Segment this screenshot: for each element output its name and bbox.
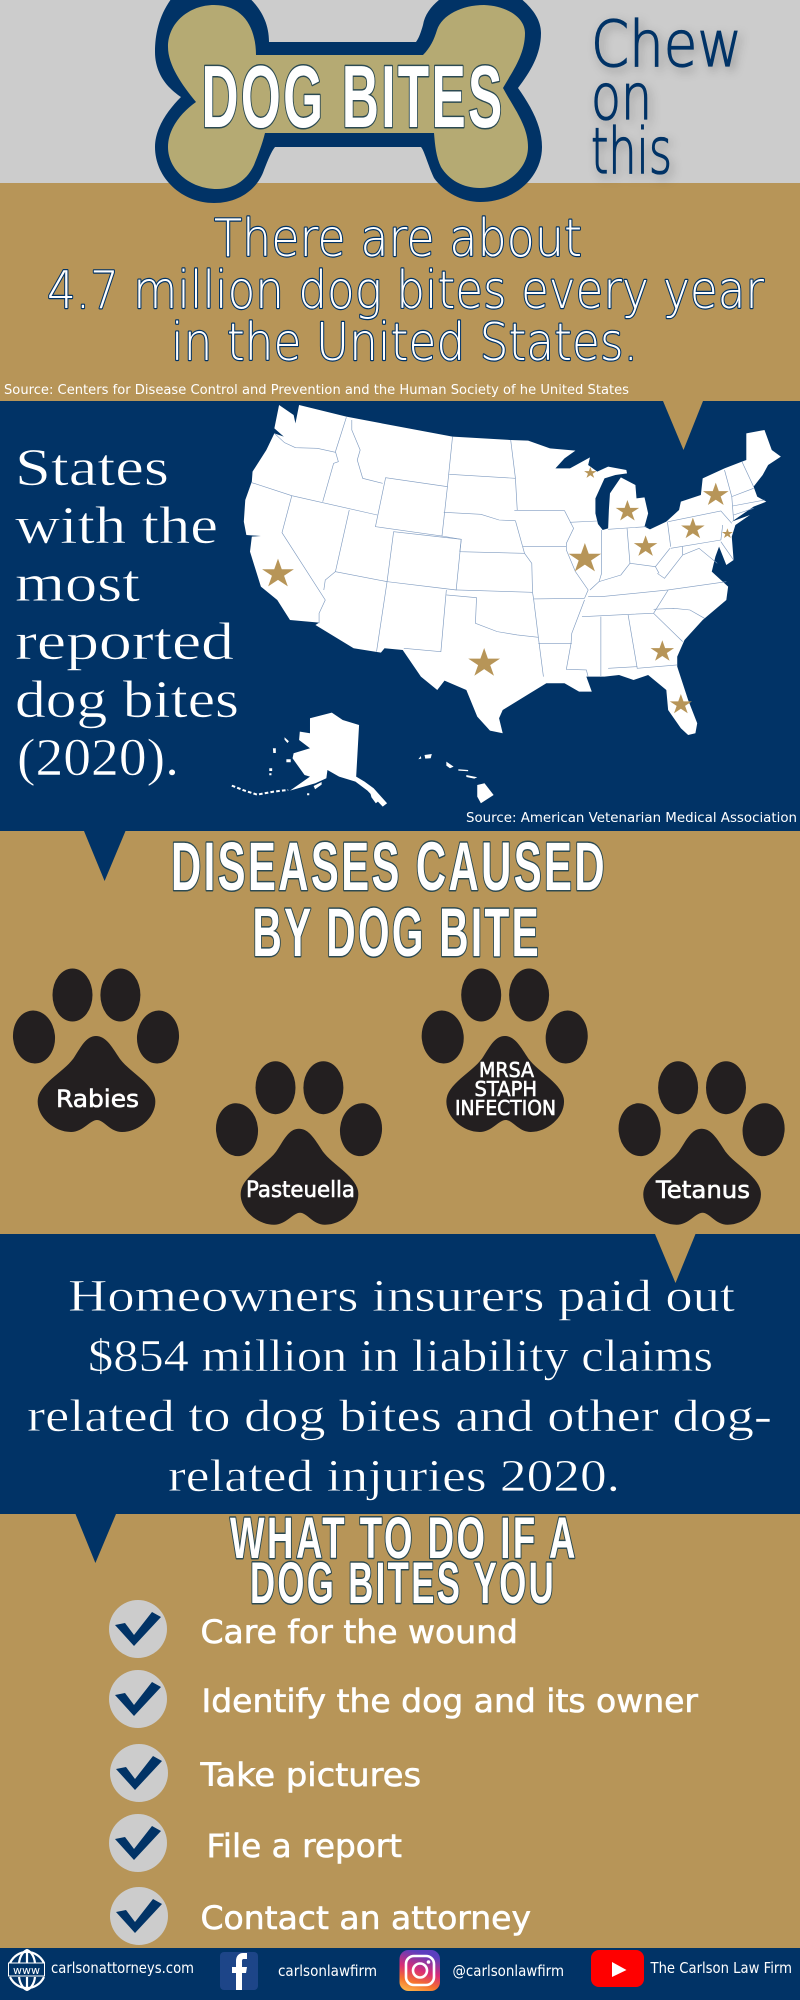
- heading: Chew on this: on: [591, 61, 652, 134]
- icon: paw MRSA staph infection: MRSA: [479, 1058, 534, 1082]
- heading: what to do if a dog bites you: WHAT TO DO IF A: [230, 1506, 578, 1571]
- icon: paw Rabies: [11, 968, 181, 1132]
- footer: website: [8, 1950, 194, 1990]
- text block: homeowners insurers liability claims: $854 million in liability claims: [88, 1331, 713, 1381]
- checklist item: care for the wound: [109, 1600, 518, 1658]
- heading: Chew on this: Chew: [591, 8, 742, 81]
- arrow: navy pointer into diseases panel: [84, 831, 126, 881]
- icon: paw Pasteuella: Pasteuella: [246, 1178, 355, 1203]
- text block: homeowners insurers liability claims: related injuries 2020.: [168, 1451, 620, 1501]
- icon: paw Pasteuella: [214, 1061, 384, 1225]
- checklist item: care for the wound: Care for the wound: [200, 1613, 518, 1651]
- footer: website: www: [13, 1964, 40, 1977]
- heading: what to do if a dog bites you: DOG BITES YOU: [250, 1551, 556, 1616]
- source note: AVMA: Source: American Vetenarian Medical Association: [466, 811, 797, 826]
- footer: youtube: [591, 1950, 792, 1987]
- text block: homeowners insurers liability claims: related to dog bites and other dog-: [27, 1391, 772, 1441]
- footer: facebook: [220, 1952, 377, 1990]
- text block: states with the most reported dog bites: dog bites: [15, 671, 239, 729]
- icon: paw MRSA staph infection: INFECTION: [455, 1096, 556, 1120]
- text block: 4.7 million dog bites statistic: [47, 209, 765, 373]
- icon: paw MRSA staph infection: [419, 968, 590, 1132]
- footer: instagram: @carlsonlawfirm: [452, 1962, 564, 1980]
- text block: 4.7 million dog bites statistic: There are about: [214, 209, 582, 269]
- checklist item: contact an attorney: [110, 1887, 531, 1945]
- footer: instagram: [400, 1950, 564, 1991]
- icon: paw Tetanus: Tetanus: [655, 1176, 750, 1204]
- text block: states with the most reported dog bites: most: [15, 555, 140, 613]
- text block: 4.7 million dog bites statistic: in the United States.: [171, 313, 638, 373]
- heading: Chew on this: this: [591, 115, 672, 188]
- heading: what to do if a dog bites you: [230, 1506, 578, 1616]
- icon: paw Tetanus: [616, 1061, 787, 1225]
- arrow: navy pointer into advice panel: [76, 1514, 116, 1563]
- icon: paw Rabies: Rabies: [56, 1085, 139, 1113]
- footer: facebook: carlsonlawfirm: [278, 1962, 377, 1980]
- heading: diseases caused by dog bite: [171, 828, 607, 971]
- text block: states with the most reported dog bites: reported: [15, 613, 234, 671]
- checklist item: take pictures: Take pictures: [199, 1756, 421, 1794]
- checklist item: identify the dog and its owner: Identify the dog and its owner: [202, 1682, 699, 1720]
- text block: states with the most reported dog bites: States: [15, 439, 169, 497]
- checklist item: file a report: [109, 1814, 402, 1872]
- source note: CDC: Source: Centers for Disease Control and Prevention and the Human Society of he United States: [4, 383, 629, 398]
- heading: Chew on this: [591, 8, 742, 188]
- text block: states with the most reported dog bites: [15, 439, 239, 787]
- arrow: tan pointer into map panel: [663, 401, 703, 450]
- icon: dog bone logo with title: [155, 0, 542, 203]
- title: DOG BITES: [202, 47, 504, 146]
- checklist item: identify the dog and its owner: [109, 1670, 699, 1728]
- arrow: tan pointer into insurance panel: [655, 1234, 696, 1283]
- text block: homeowners insurers liability claims: [27, 1271, 772, 1501]
- heading: diseases caused by dog bite: BY DOG BITE: [252, 894, 541, 971]
- icon: stars on reported states: [262, 467, 733, 713]
- text block: states with the most reported dog bites: (2020).: [17, 729, 179, 787]
- text block: homeowners insurers liability claims: Homeowners insurers paid out: [68, 1271, 736, 1321]
- checklist item: take pictures: [110, 1744, 421, 1802]
- icon: paw MRSA staph infection: STAPH: [475, 1077, 537, 1101]
- text block: states with the most reported dog bites: with the: [15, 497, 218, 555]
- checklist item: contact an attorney: Contact an attorney: [200, 1899, 531, 1937]
- map: United States with starred states: [232, 405, 781, 807]
- footer: website: carlsonattorneys.com: [51, 1959, 194, 1977]
- checklist item: file a report: File a report: [206, 1827, 402, 1865]
